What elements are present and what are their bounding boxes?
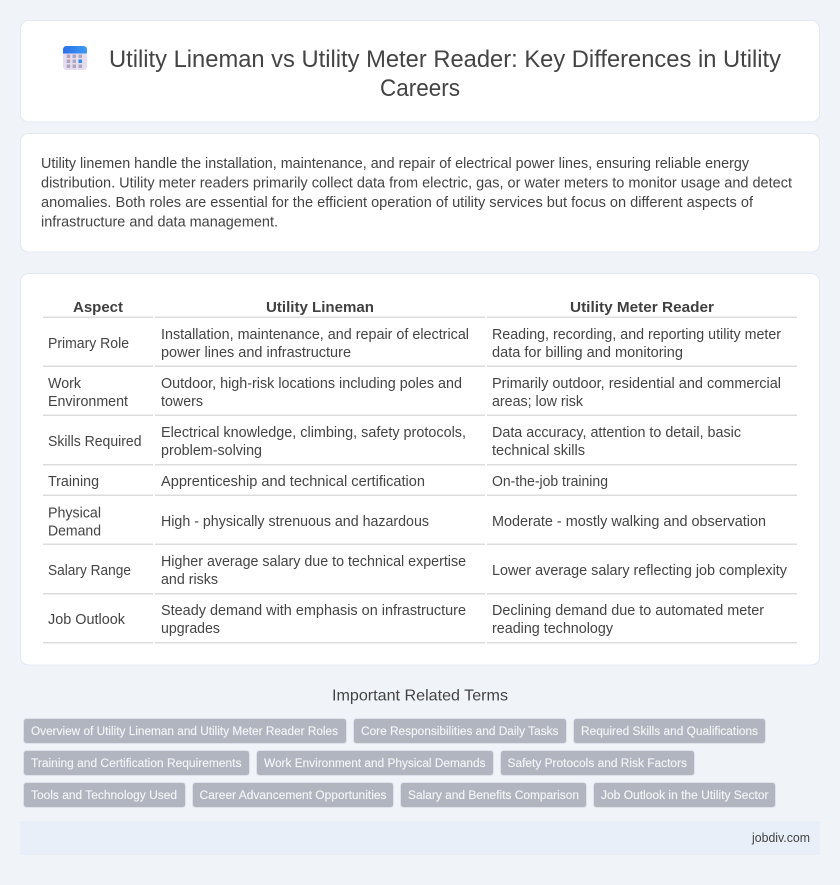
text block: introduction: anomalies. Both roles are essential for the efficient operation of utility services but focus on different aspects of — [41, 195, 753, 211]
row: primary role: power lines and infrastructure — [161, 345, 351, 361]
row: primary role: Reading, recording, and reporting utility meter — [492, 327, 781, 343]
related term tags: Salary and Benefits Comparison — [408, 788, 579, 802]
title — [109, 46, 782, 102]
row: skills required: technical skills — [492, 443, 585, 459]
related term tags: Required Skills and Qualifications — [581, 724, 758, 738]
row: salary range: Higher average salary due to technical expertise — [161, 554, 466, 570]
row: work environment: areas; low risk — [492, 394, 584, 410]
related term tags: Training and Certification Requirements — [31, 756, 242, 770]
related term tags: Job Outlook in the Utility Sector — [601, 788, 768, 802]
row: skills required: Skills Required — [48, 434, 142, 450]
related term tags: Career Advancement Opportunities — [200, 788, 386, 802]
text block: introduction: Utility linemen handle the installation, maintenance, and repair of electrical power lines, ensuring reliable energy — [41, 156, 750, 172]
row: work environment: Work — [48, 376, 82, 392]
panel: comparison table — [20, 274, 820, 665]
row: primary role — [48, 327, 781, 361]
text block: introduction: distribution. Utility meter readers primarily collect data from electric, gas, or water meters to monitor usage and detect — [41, 176, 792, 192]
row: job outlook: Steady demand with emphasis on infrastructure — [161, 603, 466, 619]
row: job outlook: Declining demand due to automated meter — [492, 603, 764, 619]
row: physical demand: Physical — [48, 506, 101, 522]
row: physical demand: High - physically strenuous and hazardous — [161, 514, 429, 530]
row: work environment — [48, 376, 781, 410]
row: salary range — [48, 554, 788, 588]
row: work environment: Outdoor, high-risk locations including poles and — [161, 376, 462, 392]
related term tags: Overview of Utility Lineman and Utility Meter Reader Roles — [31, 724, 338, 738]
related term tags: Work Environment and Physical Demands — [264, 756, 486, 770]
row: primary role: Primary Role — [48, 336, 129, 352]
footer — [20, 821, 820, 855]
row: skills required — [48, 425, 741, 459]
text block: introduction: infrastructure and data management. — [41, 214, 278, 230]
table header: Aspect — [73, 299, 123, 316]
row: training: On-the-job training — [492, 474, 608, 490]
table header — [73, 299, 714, 316]
row: training — [48, 474, 608, 490]
row: salary range: and risks — [161, 572, 218, 588]
row: primary role: data for billing and monitoring — [492, 345, 683, 361]
footer: jobdiv.com — [751, 831, 810, 845]
row: job outlook: upgrades — [161, 621, 220, 637]
row: skills required: Data accuracy, attention to detail, basic — [492, 425, 741, 441]
row: job outlook — [48, 603, 764, 637]
row: training: Training — [48, 474, 99, 490]
panel: title header — [20, 20, 820, 122]
row: salary range: Lower average salary reflecting job complexity — [492, 563, 788, 579]
row: physical demand: Moderate - mostly walking and observation — [492, 514, 766, 530]
row: skills required: problem-solving — [161, 443, 262, 459]
row: salary range: Salary Range — [48, 563, 131, 579]
icon: calendar — [63, 46, 87, 70]
title: Careers — [380, 75, 460, 102]
row: work environment: Environment — [48, 394, 128, 410]
table header: Utility Meter Reader — [570, 299, 714, 316]
related term tags: Tools and Technology Used — [31, 788, 177, 802]
row: training: Apprenticeship and technical certification — [161, 474, 425, 490]
text block: introduction — [41, 156, 792, 230]
row: work environment: Primarily outdoor, residential and commercial — [492, 376, 781, 392]
row: job outlook: reading technology — [492, 621, 614, 637]
row: physical demand — [48, 506, 766, 540]
related term tags: Safety Protocols and Risk Factors — [508, 756, 687, 770]
row: skills required: Electrical knowledge, climbing, safety protocols, — [161, 425, 466, 441]
table header: Utility Lineman — [266, 299, 374, 316]
title: Utility Lineman vs Utility Meter Reader: Key Differences in Utility — [109, 46, 782, 73]
panel: introduction — [20, 134, 820, 252]
related term tags — [24, 718, 776, 808]
row: work environment: towers — [161, 394, 203, 410]
heading: important related terms: Important Related Terms — [332, 688, 508, 704]
row: primary role: Installation, maintenance, and repair of electrical — [161, 327, 469, 343]
related term tags: Core Responsibilities and Daily Tasks — [361, 724, 558, 738]
row: job outlook: Job Outlook — [48, 612, 126, 628]
row: physical demand: Demand — [48, 524, 101, 540]
